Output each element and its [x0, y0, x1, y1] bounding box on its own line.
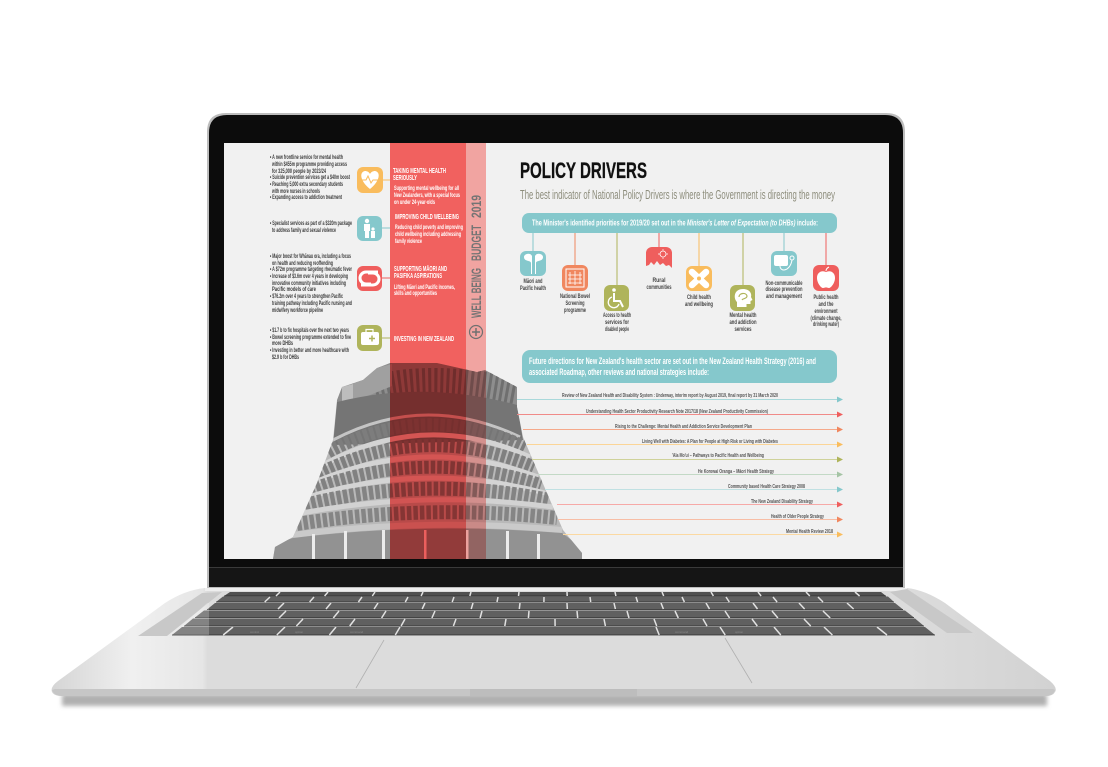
priority: non-communicable disease: [766, 233, 803, 300]
priority: mental health: Mental health: [730, 313, 757, 319]
red column text: Lifting Māori and Pacific incomes,: [394, 285, 455, 291]
red column text: TAKING MENTAL HEALTH: [393, 166, 446, 175]
arrow: living well with diabetes: [527, 439, 843, 448]
priority: mental health: [730, 233, 757, 333]
icon: koru: [357, 266, 390, 291]
priority: mental health: and addiction: [730, 320, 757, 326]
left column bullet text: • $76.2m over 4 years to strengthen Pacific: [270, 294, 343, 300]
priority: National Bowel Screening: programme: [564, 308, 586, 314]
priority: mental health: services: [734, 327, 752, 333]
left column bullet text: • $1.7 b to fix hospitals over the next two years: [270, 328, 349, 334]
priority: non-communicable disease: Non-communicable: [766, 281, 803, 287]
priority: Maori and Pacific health: Pacific health: [520, 286, 546, 292]
priority: public health and environment: drinking water): [813, 322, 839, 328]
priority: rural communities: [646, 233, 672, 291]
left column bullet text: Pacific models of care: [272, 287, 316, 293]
left column bullet text: • A new frontline service for mental health: [270, 155, 343, 161]
future directions banner: associated Roadmap, other reviews and national strategies include:: [529, 367, 709, 378]
arrow: Ala Moui: [532, 453, 843, 462]
priority: child health: and wellbeing: [685, 302, 713, 308]
arrow: mental health review: [563, 529, 843, 538]
arrow: older people strategy: [558, 514, 843, 522]
arrow: He Korowai Oranga: [538, 469, 843, 478]
arrow: productivity research note: Understanding Health Sector Productivity Research Note 2017/18 (New Zealand Productivity Commission): [586, 409, 768, 415]
keyboard: option: [735, 630, 744, 634]
arrow: rising to the challenge: Rising to the Challenge: Mental Health and Addiction Service Development Plan: [615, 424, 752, 430]
left column bullet text: • Increase of $3.6m over 4 years in developing: [270, 274, 348, 280]
left column bullet text: $2.9 b for DHBs: [272, 355, 299, 361]
keyboard: command: [675, 630, 689, 634]
arrow: disability strategy: [557, 499, 843, 508]
arrow: older people strategy: Health of Older People Strategy: [771, 514, 825, 520]
left column bullet text: • Specialist services as part of a $320m package: [270, 221, 352, 227]
wellbeing budget vertical label: [468, 195, 484, 338]
keyboard: control: [250, 630, 259, 634]
priority: public health and environment: environment: [814, 309, 838, 315]
left column bullet text: with more nurses in schools: [271, 189, 320, 195]
red column text: skills and opportunities: [394, 291, 437, 297]
left column bullet text: innovative community initiatives including: [272, 281, 346, 287]
future directions banner: Future directions for New Zealand's health sector are set out in the New Zealand Health Strategy (2016) and: [529, 356, 816, 367]
priorities banner: [522, 213, 837, 233]
pink column: [466, 143, 486, 559]
keyboard: command: [350, 630, 364, 634]
red column text: SERIOUSLY: [393, 173, 417, 182]
arrow: rising to the challenge: [523, 424, 843, 432]
left column bullet text: training pathway including Pacific nursing and: [272, 301, 352, 307]
left column bullet text: • Investing in better and more healthcare with: [270, 348, 349, 354]
left column bullet text: • A $72m programme targeting rheumatic fever: [270, 267, 352, 273]
left column bullet text: for 325,000 people by 2023/24: [272, 169, 326, 175]
laptop base deck: [52, 588, 1056, 696]
priority: Maori and Pacific health: [520, 233, 546, 292]
keyboard: [172, 592, 935, 635]
icon: parent and child: [357, 216, 390, 241]
priority: rural communities: Rural: [652, 278, 666, 284]
priority: National Bowel Screening: Screening: [566, 301, 585, 307]
priority: access for disabled people: [603, 233, 631, 333]
left column bullet text: • Expanding access to addiction treatment: [270, 195, 342, 201]
left column bullet text: more DHBs: [272, 341, 293, 347]
wellbeing budget vertical label: WELL BEING: [468, 268, 484, 318]
Beehive building photo: [270, 360, 585, 560]
priority: non-communicable disease: and management: [766, 294, 802, 300]
priority: Maori and Pacific health: Māori and: [524, 279, 543, 285]
left column bullet text: on health and reducing reoffending: [272, 261, 333, 267]
red column text: child wellbeing including addressing: [395, 232, 461, 238]
red column text: Reducing child poverty and improving: [395, 225, 463, 231]
red column text: New Zealanders, with a special focus: [394, 193, 460, 199]
red column text: [393, 166, 463, 343]
priority: child health: Child health: [687, 295, 711, 301]
left column bullet text: • Bowel screening programme extended to five: [270, 335, 351, 341]
red column text: family violence: [395, 239, 422, 245]
priority: National Bowel Screening: National Bowel: [560, 294, 590, 300]
priority: public health and environment: (climate change,: [810, 316, 842, 322]
red column: [390, 143, 466, 559]
red column text: INVESTING IN NEW ZEALAND: [394, 334, 454, 343]
left column bullet text: within $455m programme providing access: [271, 162, 347, 168]
icon: briefcase: [357, 325, 390, 351]
left column bullet text: • Major boost for Whānau ora, including a focus: [270, 254, 351, 260]
wellbeing budget vertical label: BUDGET: [468, 225, 484, 261]
subtitle: The best indicator of National Policy Drivers is where the Government is directing the money: [520, 187, 835, 202]
priority: access for disabled people: services for: [605, 320, 629, 326]
priority: public health and environment: and the: [818, 302, 834, 308]
red column text: PASIFIKA ASPIRATIONS: [394, 271, 442, 280]
red column text: on under 24-year-olds: [394, 200, 435, 206]
icon: heart: [357, 167, 390, 193]
priority: child health: [685, 233, 713, 308]
priority: National Bowel Screening: [560, 233, 590, 314]
laptop lid and bezel: [207, 113, 905, 588]
arrow: mental health review: Mental Health Review 2018: [786, 529, 833, 535]
priority: public health and environment: Public health: [814, 295, 839, 301]
red column text: Supporting mental wellbeing for all: [394, 186, 459, 192]
priority: rural communities: communities: [646, 285, 672, 291]
arrow: community based health care: Community based Health Care Strategy 2008: [728, 484, 805, 490]
arrow: productivity research note: [517, 409, 843, 418]
left column bullet text: • Reaching 5,000 extra secondary students: [270, 182, 343, 188]
wellbeing budget vertical label: 2019: [468, 195, 484, 218]
left column bullet text: • Suicide prevention services get a $40m boost: [270, 175, 350, 181]
screen: [224, 143, 889, 560]
priority: non-communicable disease: disease prevention: [766, 287, 803, 293]
priorities banner: The Minister's identified priorities for 2019/20 set out in the Minister's Letter of Expectation (to DHBs) include:: [532, 218, 818, 228]
future directions banner: [522, 350, 837, 383]
priority: access for disabled people: Access to health: [603, 313, 631, 319]
left column bullet text: to address family and sexual violence: [272, 228, 336, 234]
arrow: disability strategy: The New Zealand Disability Strategy: [751, 499, 814, 505]
arrow: community based health care: [545, 484, 843, 492]
red column text: IMPROVING CHILD WELLBEING: [395, 212, 459, 221]
left column bullet text: [270, 155, 352, 361]
priority: access for disabled people: disabled people: [605, 327, 629, 333]
arrow: living well with diabetes: Living Well with Diabetes: A Plan for People at High Risk or Living with Diabetes: [642, 439, 778, 445]
arrow: He Korowai Oranga: He Korowai Oranga – Māori Health Strategy: [698, 469, 775, 475]
laptop base shadow: [62, 694, 1047, 706]
arrow: review of health and disability system: Review of New Zealand Health and Disability System : Underway, interim report by August 2019, final report by 31 March 2020: [562, 393, 778, 399]
red column text: SUPPORTING MĀORI AND: [394, 264, 447, 273]
arrow: Ala Moui: 'Ala Mo'ui – Pathways to Pacific Health and Wellbeing: [672, 453, 764, 459]
keyboard: option: [295, 630, 304, 634]
title: POLICY DRIVERS: [520, 158, 647, 183]
arrow: review of health and disability system: [517, 393, 843, 402]
priority: public health and environment: [810, 233, 842, 328]
left column bullet text: midwifery workforce pipeline: [272, 308, 323, 314]
